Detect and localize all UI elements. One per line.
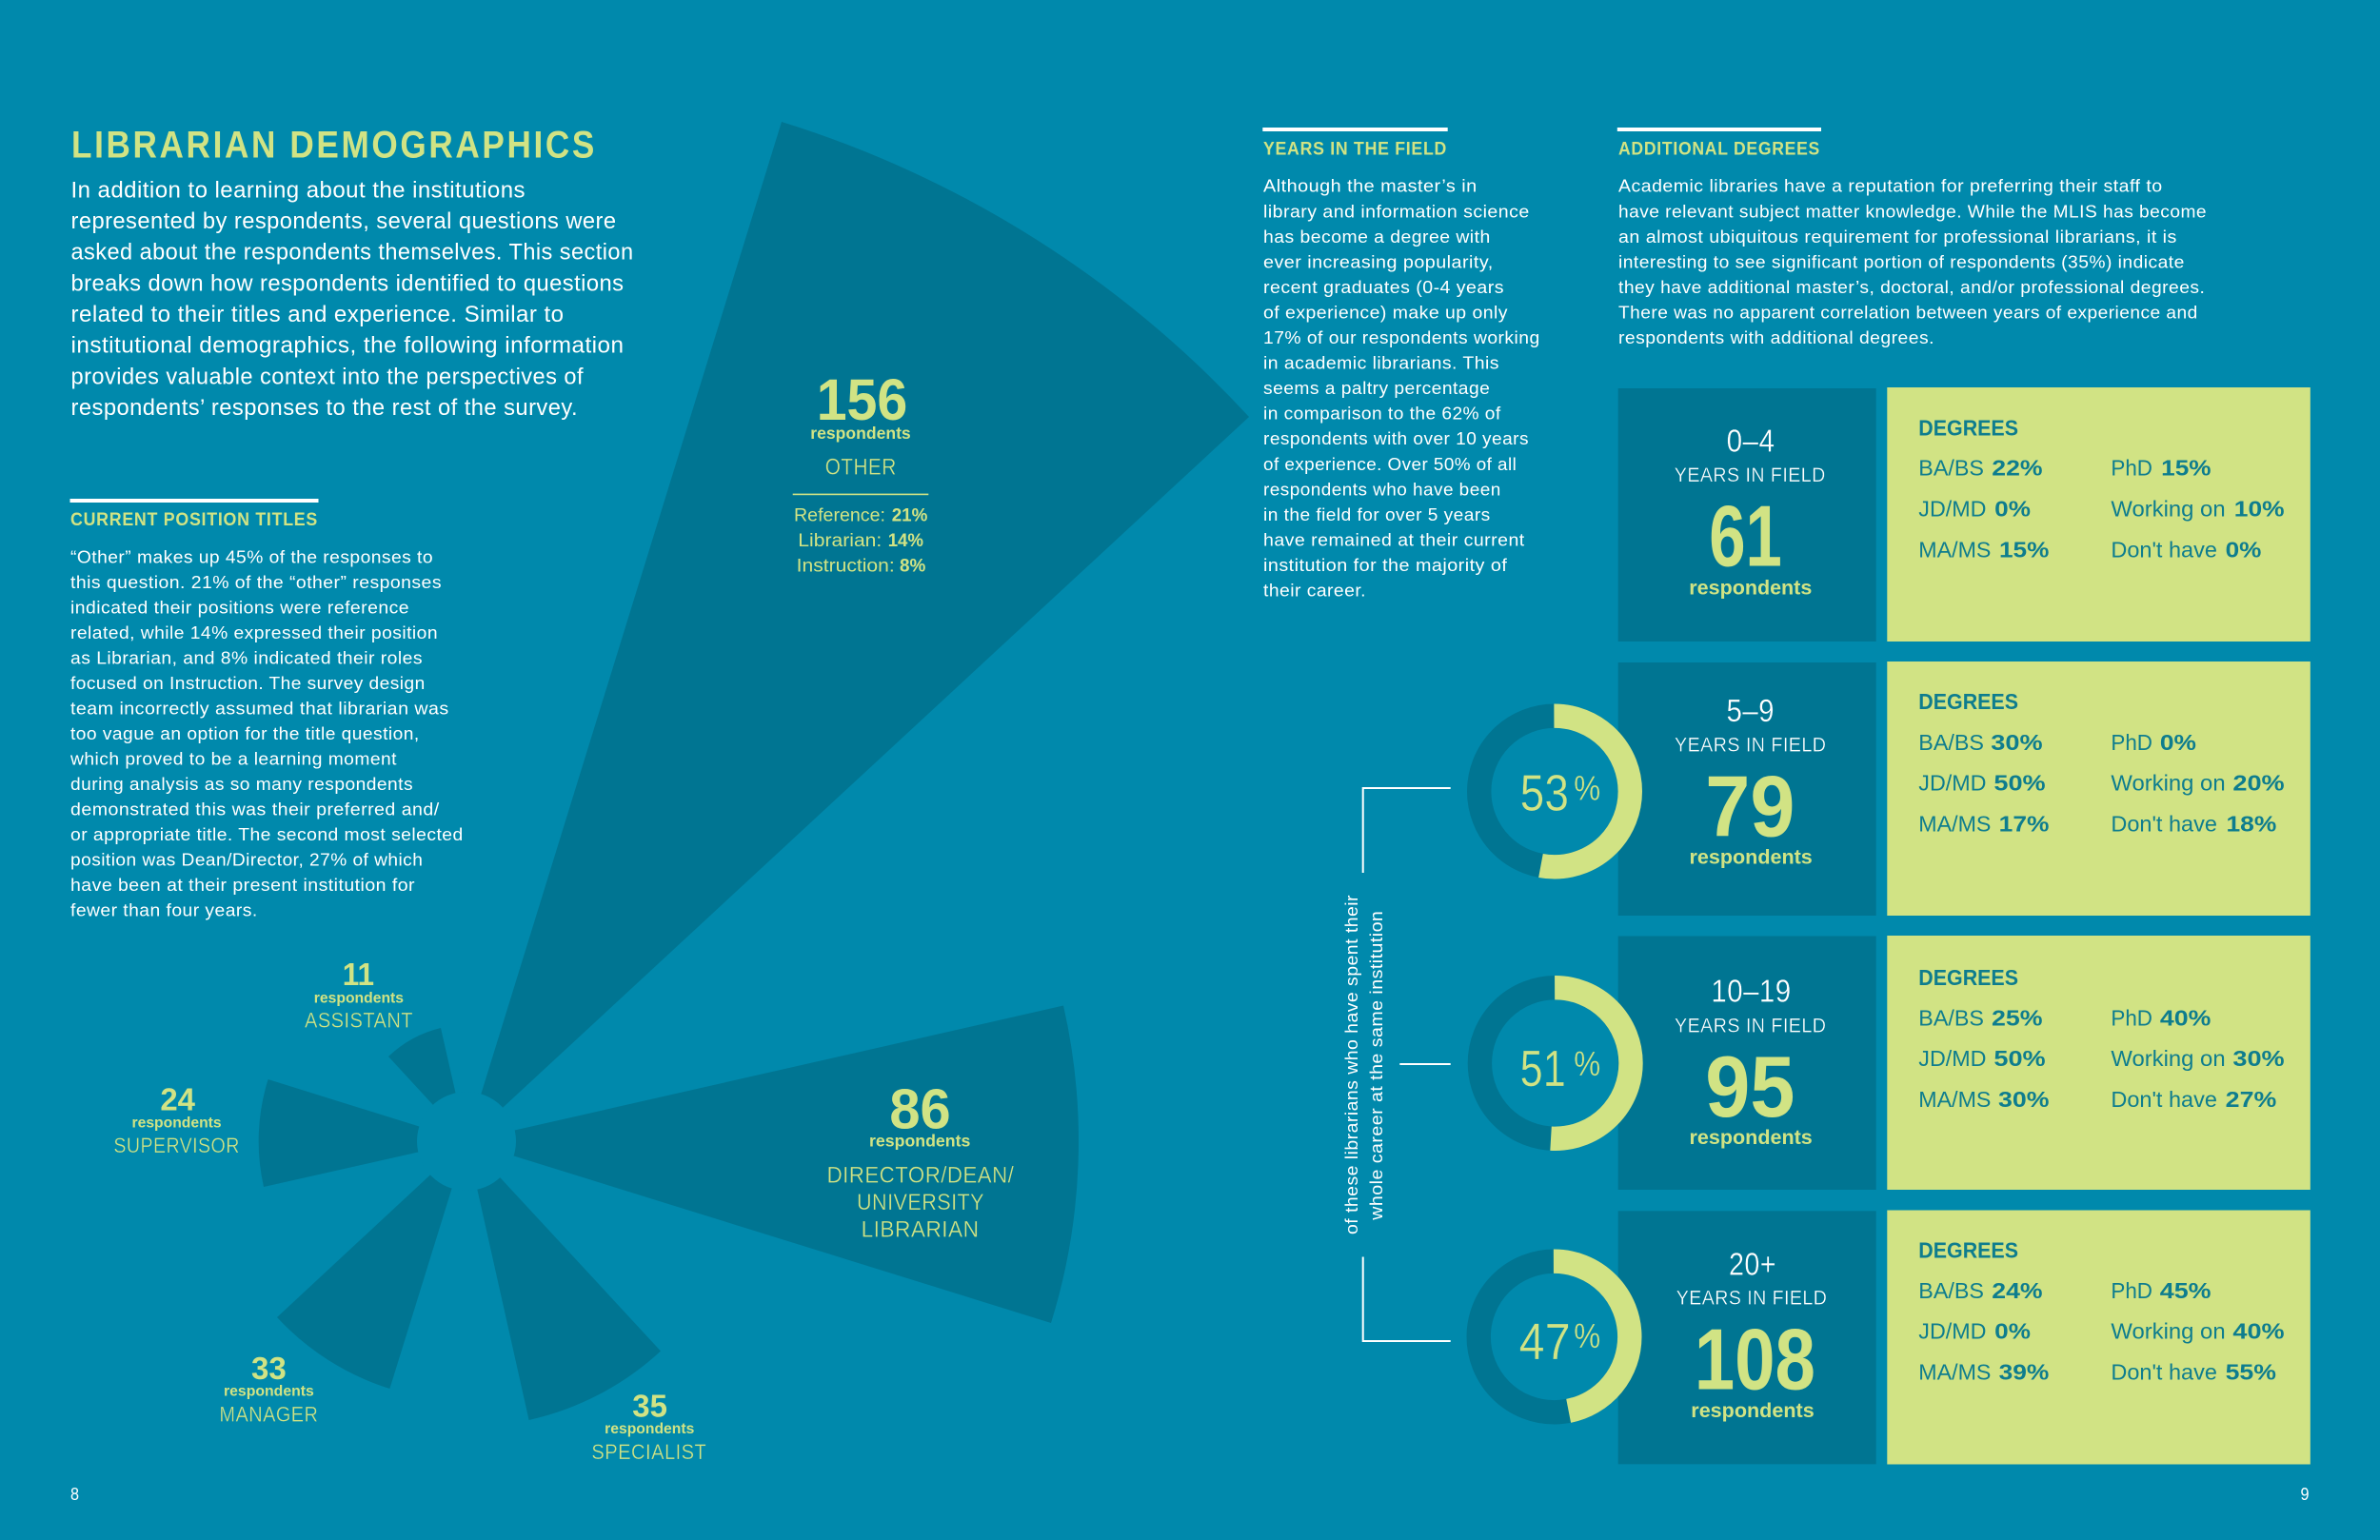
degrees panel: 0-4 years: Don't have bbox=[2111, 537, 2217, 562]
degrees panel: 5-9 years: BA/BS bbox=[1918, 730, 1984, 755]
label: other: Reference: bbox=[794, 506, 885, 526]
degrees panel: 20+ years: 55% bbox=[2226, 1359, 2276, 1384]
text block: years in the field: of experience) make up only bbox=[1263, 302, 1508, 322]
text block: current position titles: during analysis as so many respondents bbox=[70, 774, 413, 794]
label: specialist: respondents bbox=[605, 1421, 694, 1437]
text block: years in the field: institution for the majority of bbox=[1263, 555, 1508, 575]
rotated caption bbox=[1341, 895, 1386, 1234]
text block: additional degrees bbox=[1618, 176, 2207, 347]
row: 0-4 years in field: YEARS IN FIELD bbox=[1675, 464, 1826, 486]
degrees panel: 20+ years: PhD bbox=[2111, 1278, 2152, 1303]
rotated caption: of these librarians who have spent their bbox=[1341, 895, 1361, 1234]
label: supervisor: SUPERVISOR bbox=[113, 1134, 240, 1157]
label: specialist bbox=[591, 1389, 706, 1464]
degrees panel: 20+ years: Working on bbox=[2111, 1319, 2226, 1344]
label: manager bbox=[219, 1351, 318, 1426]
page number 8: 8 bbox=[70, 1485, 79, 1504]
label: other: 14% bbox=[888, 531, 923, 551]
row: 0-4 years in field: respondents bbox=[1689, 576, 1812, 599]
degrees panel: 0-4 years: 0% bbox=[2226, 537, 2261, 562]
degrees panel: 10-19 years: 30% bbox=[1998, 1087, 2049, 1112]
wedge: manager bbox=[277, 1141, 466, 1389]
degrees panel: 10-19 years: 27% bbox=[2226, 1087, 2276, 1112]
text block: current position titles: team incorrectly assumed that librarian was bbox=[70, 699, 449, 719]
text block: current position titles: which proved to be a learning moment bbox=[69, 749, 397, 769]
degrees panel: 10-19 years: DEGREES bbox=[1918, 965, 2018, 990]
text block: years in the field: recent graduates (0-4 years bbox=[1263, 277, 1504, 297]
rotated caption: whole career at the same institution bbox=[1366, 911, 1386, 1221]
degrees panel: 10-19 years: PhD bbox=[2111, 1005, 2152, 1030]
degrees panel: 5-9 years: 30% bbox=[1991, 730, 2043, 755]
row: 5-9 years in field: 5–9 bbox=[1727, 693, 1775, 728]
degrees panel: 0-4 years: 15% bbox=[1999, 537, 2049, 562]
text block: years in the field bbox=[1263, 176, 1540, 600]
label: director dean university librarian: LIBRARIAN bbox=[862, 1216, 979, 1242]
donut: 47 percent: % bbox=[1574, 1316, 1601, 1355]
text block: current position titles: “Other” makes up 45% of the responses to bbox=[70, 547, 433, 567]
row: 5-9 years in field: YEARS IN FIELD bbox=[1675, 734, 1826, 757]
degrees panel: 5-9 years: 18% bbox=[2226, 811, 2276, 836]
donut: 51 percent: 51 bbox=[1520, 1040, 1566, 1097]
wedge: specialist bbox=[466, 1141, 661, 1420]
section: additional degrees bbox=[1617, 128, 2207, 347]
degrees panel: 20+ years: 24% bbox=[1992, 1278, 2043, 1303]
text block: years in the field: in the field for over 5 years bbox=[1263, 504, 1491, 524]
label: specialist: 35 bbox=[632, 1389, 667, 1424]
degrees panel: 5-9 years: MA/MS bbox=[1918, 811, 1991, 836]
intro text block: breaks down how respondents identified to questions bbox=[70, 270, 625, 296]
degrees panel: 10-19 years: Working on bbox=[2111, 1046, 2226, 1071]
label: specialist: SPECIALIST bbox=[591, 1440, 706, 1464]
degrees panel: 0-4 years: 0% bbox=[1994, 496, 2031, 521]
text block: current position titles: focused on Instruction. The survey design bbox=[70, 673, 426, 693]
wedge: director bbox=[466, 1005, 1079, 1323]
degrees panel: 5-9 years bbox=[1887, 661, 2311, 916]
degrees panel: 10-19 years: 30% bbox=[2232, 1046, 2285, 1071]
text block: current position titles: this question. 21% of the “other” responses bbox=[70, 572, 442, 592]
degrees panel: 0-4 years: Working on bbox=[2111, 496, 2226, 521]
text block: additional degrees: There was no apparent correlation between years of experience and bbox=[1618, 302, 2198, 322]
label: supervisor: 24 bbox=[160, 1081, 196, 1116]
degrees panel: 10-19 years: Don't have bbox=[2111, 1087, 2217, 1112]
intro text block: provides valuable context into the perspectives of bbox=[70, 364, 584, 389]
degrees panel: 20+ years: 40% bbox=[2232, 1319, 2285, 1344]
degrees panel: 5-9 years: 20% bbox=[2232, 771, 2285, 796]
degrees panel: 20+ years: JD/MD bbox=[1918, 1319, 1986, 1344]
row: 10-19 years in field bbox=[1618, 936, 2311, 1190]
text block: current position titles: fewer than four years. bbox=[70, 900, 258, 920]
text block: current position titles: related, while 14% expressed their position bbox=[70, 622, 438, 642]
row: 20+ years in field: 108 bbox=[1695, 1312, 1815, 1408]
degrees panel: 5-9 years: DEGREES bbox=[1918, 689, 2018, 714]
degrees panel: 10-19 years: MA/MS bbox=[1918, 1087, 1991, 1112]
label: other: 156 bbox=[817, 367, 907, 432]
text block: current position titles: have been at their present institution for bbox=[70, 875, 415, 895]
intro text block: related to their titles and experience. Similar to bbox=[70, 302, 564, 327]
donut: 47 percent: 47 bbox=[1519, 1313, 1571, 1371]
donut: 51 percent: % bbox=[1574, 1044, 1601, 1083]
label: other: OTHER bbox=[825, 455, 897, 481]
text block: years in the field: library and information science bbox=[1263, 201, 1530, 221]
text block: years in the field: in academic librarians. This bbox=[1263, 353, 1499, 373]
degrees panel: 5-9 years: Don't have bbox=[2111, 811, 2217, 836]
chart: polar area chart of current position titles bbox=[259, 122, 1249, 1420]
text block: years in the field: 17% of our respondents working bbox=[1263, 327, 1540, 347]
wedge: assistant bbox=[388, 1028, 466, 1141]
degrees panel: 0-4 years: DEGREES bbox=[1918, 415, 2018, 440]
degrees panel: 20+ years: Don't have bbox=[2111, 1359, 2217, 1384]
text block: years in the field: respondents who have been bbox=[1263, 479, 1501, 499]
text block: current position titles: demonstrated this was their preferred and/ bbox=[70, 800, 440, 819]
degrees panel: 0-4 years: JD/MD bbox=[1918, 496, 1986, 521]
degrees panel: 10-19 years: 50% bbox=[1993, 1046, 2046, 1071]
label: director dean university librarian: UNIVERSITY bbox=[857, 1190, 984, 1215]
label: other: respondents bbox=[810, 424, 911, 443]
label: manager: MANAGER bbox=[219, 1402, 318, 1426]
text block: current position titles: position was Dean/Director, 27% of which bbox=[70, 850, 423, 870]
label: supervisor bbox=[113, 1081, 240, 1157]
text block: additional degrees: Academic libraries have a reputation for preferring their staff to bbox=[1618, 176, 2163, 196]
label: other: 21% bbox=[892, 506, 927, 526]
row: 0-4 years in field bbox=[1618, 387, 2311, 642]
donut: 53 percent: % bbox=[1574, 769, 1601, 808]
chart centre hole bbox=[417, 1092, 516, 1191]
donut: 51 percent bbox=[1479, 988, 1631, 1138]
degrees panel: 10-19 years: JD/MD bbox=[1918, 1046, 1986, 1071]
label: other: Librarian: bbox=[798, 531, 882, 551]
degrees panel: 10-19 years: BA/BS bbox=[1918, 1005, 1984, 1030]
label: assistant bbox=[305, 957, 413, 1032]
degrees panel: 10-19 years bbox=[1887, 936, 2311, 1190]
degrees panel: 10-19 years: 40% bbox=[2160, 1005, 2211, 1030]
row: 20+ years in field bbox=[1618, 1211, 2311, 1464]
label: supervisor: respondents bbox=[131, 1115, 222, 1131]
text block: current position titles: as Librarian, and 8% indicated their roles bbox=[70, 648, 423, 668]
heading: years in the field: YEARS IN THE FIELD bbox=[1263, 138, 1447, 159]
text block: additional degrees: have relevant subject matter knowledge. While the MLIS has become bbox=[1618, 201, 2207, 221]
heading: current position titles: CURRENT POSITION TITLES bbox=[70, 509, 318, 530]
bracket connecting donuts bbox=[1363, 788, 1451, 1341]
row: 10-19 years in field: 95 bbox=[1705, 1039, 1795, 1135]
label: other: 8% bbox=[900, 557, 925, 577]
label: assistant: ASSISTANT bbox=[305, 1009, 413, 1032]
intro text block: In addition to learning about the institutions bbox=[70, 177, 526, 203]
row: 20+ years in field: respondents bbox=[1691, 1399, 1815, 1422]
row: 20+ years in field: 20+ bbox=[1729, 1246, 1776, 1281]
degrees panel: 20+ years: 39% bbox=[1999, 1359, 2049, 1384]
label: assistant: 11 bbox=[343, 957, 374, 992]
page number 9: 9 bbox=[2300, 1485, 2310, 1504]
degrees panel: 0-4 years bbox=[1887, 387, 2311, 642]
degrees panel: 0-4 years: MA/MS bbox=[1918, 537, 1991, 562]
row: 5-9 years in field bbox=[1618, 661, 2311, 916]
title: LIBRARIAN DEMOGRAPHICS bbox=[71, 125, 597, 167]
label: director dean university librarian: DIRECTOR/DEAN/ bbox=[827, 1162, 1014, 1188]
row: 0-4 years in field: 0–4 bbox=[1727, 424, 1775, 459]
text block: additional degrees: interesting to see significant portion of respondents (35%) indicate bbox=[1618, 251, 2185, 271]
label: other: Instruction: bbox=[797, 557, 895, 577]
degrees panel: 0-4 years: BA/BS bbox=[1918, 456, 1984, 481]
text block: additional degrees: an almost ubiquitous requirement for professional librarians, it is bbox=[1618, 227, 2177, 247]
text block: current position titles bbox=[69, 547, 464, 920]
degrees panel: 0-4 years: 10% bbox=[2234, 496, 2285, 521]
degrees panel: 0-4 years: PhD bbox=[2111, 456, 2152, 481]
label: director dean university librarian bbox=[827, 1078, 1014, 1242]
intro text block: institutional demographics, the following information bbox=[70, 333, 625, 359]
degrees panel: 20+ years: BA/BS bbox=[1918, 1278, 1984, 1303]
degrees panel: 5-9 years: 50% bbox=[1993, 771, 2046, 796]
text block: current position titles: or appropriate title. The second most selected bbox=[70, 824, 464, 844]
row: 10-19 years in field: respondents bbox=[1689, 1126, 1813, 1149]
label: manager: 33 bbox=[251, 1351, 287, 1386]
text block: years in the field: of experience. Over 50% of all bbox=[1263, 454, 1517, 474]
row: 10-19 years in field: 10–19 bbox=[1711, 974, 1792, 1009]
degrees panel: 5-9 years: PhD bbox=[2111, 730, 2152, 755]
row: 20+ years in field: YEARS IN FIELD bbox=[1676, 1287, 1827, 1310]
text block: years in the field: in comparison to the 62% of bbox=[1263, 404, 1501, 424]
wedge: supervisor bbox=[259, 1079, 466, 1187]
text block: current position titles: indicated their positions were reference bbox=[70, 598, 409, 618]
row: 10-19 years in field: YEARS IN FIELD bbox=[1675, 1015, 1826, 1037]
degrees panel: 0-4 years: 15% bbox=[2161, 456, 2211, 481]
degrees panel: 20+ years: MA/MS bbox=[1918, 1359, 1991, 1384]
degrees panel: 10-19 years: 25% bbox=[1992, 1005, 2043, 1030]
section: years in the field bbox=[1262, 128, 1540, 600]
degrees panel: 5-9 years: JD/MD bbox=[1918, 771, 1986, 796]
row: 0-4 years in field: 61 bbox=[1709, 489, 1782, 585]
degrees panel: 20+ years: DEGREES bbox=[1918, 1237, 2018, 1262]
text block: years in the field: has become a degree with bbox=[1263, 227, 1491, 247]
intro text block: asked about the respondents themselves. This section bbox=[70, 240, 634, 266]
text block: years in the field: Although the master’s in bbox=[1263, 176, 1478, 196]
text block: additional degrees: they have additional master’s, doctoral, and/or professional degrees. bbox=[1618, 277, 2205, 297]
text block: years in the field: respondents with over 10 years bbox=[1263, 428, 1529, 448]
degrees panel: 5-9 years: 17% bbox=[1999, 811, 2049, 836]
label: director dean university librarian: respondents bbox=[869, 1131, 971, 1150]
row: 5-9 years in field: 79 bbox=[1705, 759, 1795, 855]
degrees panel: 20+ years bbox=[1887, 1211, 2311, 1464]
degrees panel: 20+ years: 0% bbox=[1994, 1319, 2031, 1344]
label: manager: respondents bbox=[224, 1383, 314, 1399]
text block: years in the field: seems a paltry percentage bbox=[1263, 378, 1490, 398]
wedge: other bbox=[466, 122, 1249, 1141]
text block: years in the field: have remained at their current bbox=[1263, 529, 1525, 549]
label: assistant: respondents bbox=[314, 990, 404, 1007]
donut: 53 percent bbox=[1479, 716, 1630, 867]
degrees panel: 5-9 years: Working on bbox=[2111, 771, 2226, 796]
degrees panel: 20+ years: 45% bbox=[2160, 1278, 2211, 1303]
donut: 53 percent: 53 bbox=[1520, 765, 1569, 822]
intro text block bbox=[70, 177, 634, 421]
label: director dean university librarian: 86 bbox=[889, 1078, 951, 1141]
intro text block: respondents’ responses to the rest of the survey. bbox=[70, 395, 578, 421]
heading: additional degrees: ADDITIONAL DEGREES bbox=[1618, 138, 1820, 159]
donut: 47 percent bbox=[1478, 1261, 1630, 1412]
degrees panel: 5-9 years: 0% bbox=[2160, 730, 2196, 755]
degrees panel: 0-4 years: 22% bbox=[1992, 456, 2043, 481]
intro text block: represented by respondents, several questions were bbox=[70, 208, 617, 234]
text block: current position titles: too vague an option for the title question, bbox=[70, 723, 420, 743]
section: current position titles bbox=[69, 499, 464, 920]
text block: years in the field: their career. bbox=[1263, 581, 1366, 600]
label: other bbox=[793, 367, 928, 577]
text block: years in the field: ever increasing popularity, bbox=[1263, 251, 1494, 271]
row: 5-9 years in field: respondents bbox=[1689, 845, 1813, 868]
text block: additional degrees: respondents with additional degrees. bbox=[1618, 327, 1934, 347]
